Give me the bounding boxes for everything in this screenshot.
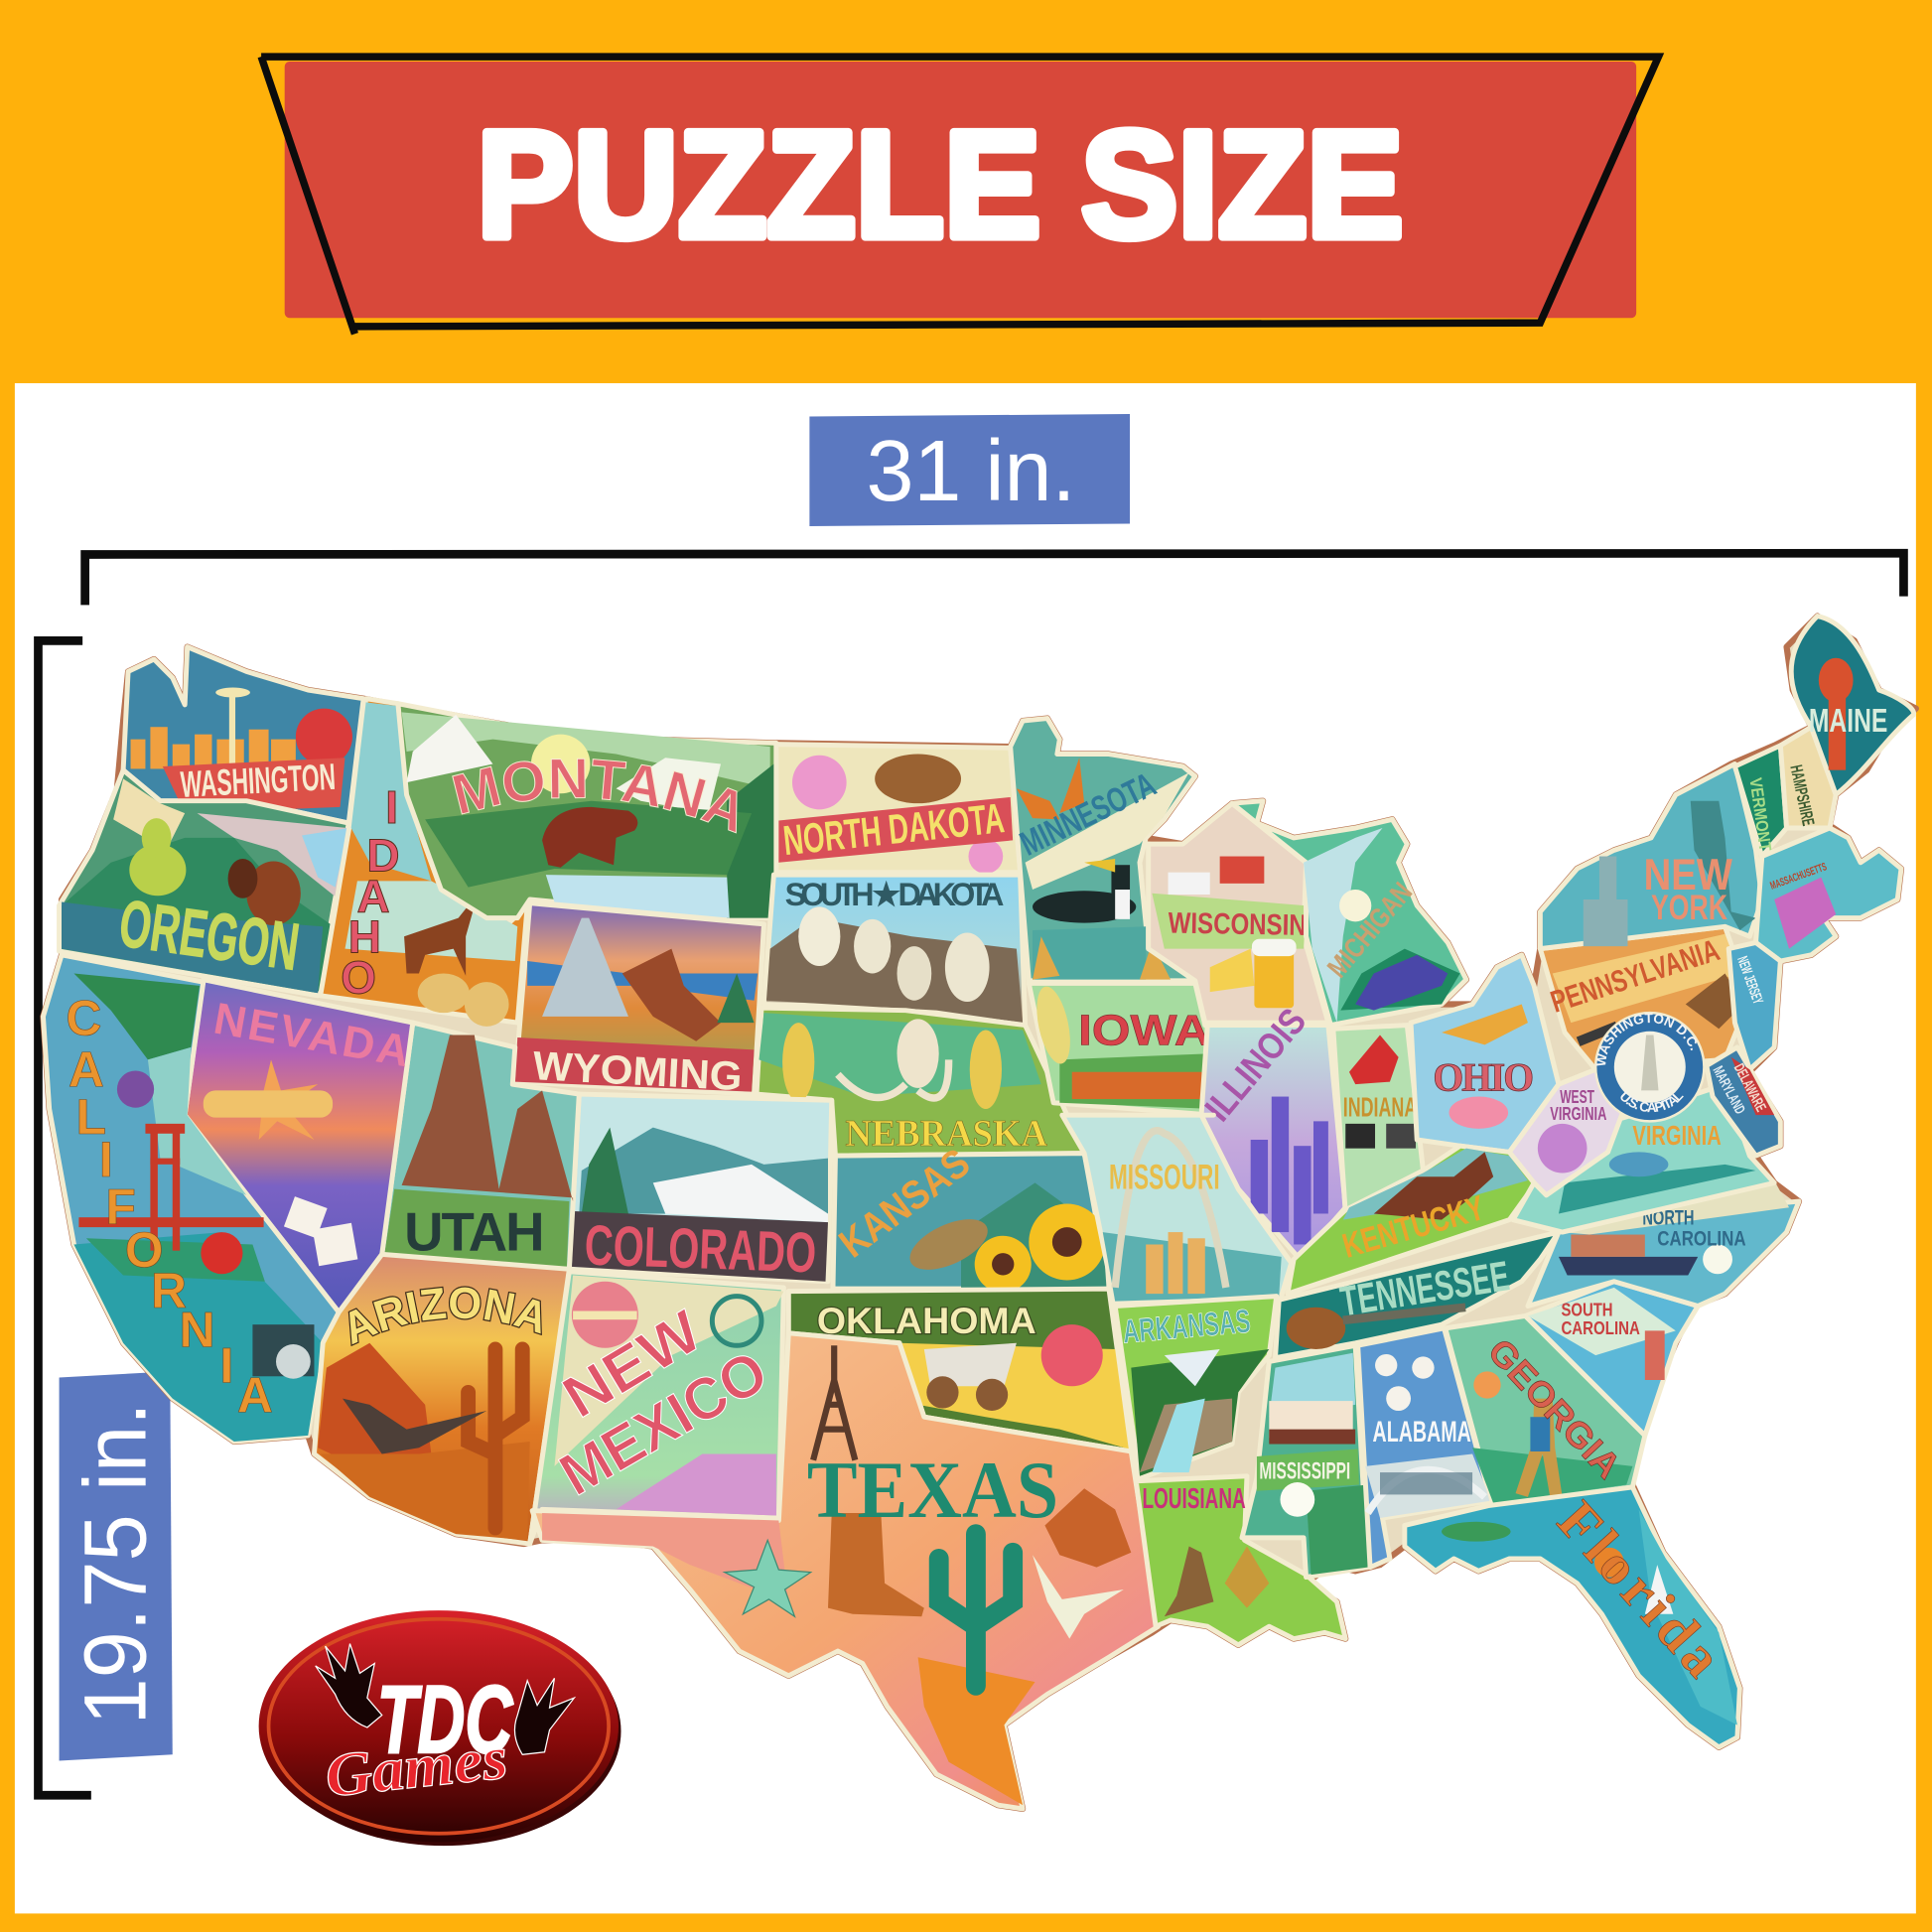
label: SOUTH ★ DAKOTA — [785, 877, 1004, 912]
icon: NYC skyline — [1584, 857, 1627, 946]
label: NORTH DAKOTA — [781, 794, 1007, 864]
states: Vermont and New Hampshire — [1734, 727, 1836, 857]
state: Arkansas — [1115, 1297, 1277, 1478]
label: MICHIGAN — [1321, 877, 1419, 984]
icon: loon — [1033, 859, 1136, 923]
icon: St. Louis skyline — [1146, 1232, 1205, 1294]
state: Utah — [382, 1023, 579, 1269]
state: California — [43, 955, 339, 1442]
state: Oklahoma — [788, 1289, 1131, 1451]
icon: guitar — [1287, 1308, 1345, 1349]
label: H — [348, 910, 381, 962]
icon: steam train — [1072, 1072, 1207, 1099]
state: Nevada — [185, 980, 413, 1312]
label: KENTUCKY — [1338, 1189, 1488, 1266]
icon: sunflowers — [1029, 1204, 1105, 1280]
label: A — [237, 1367, 273, 1423]
label: YORK — [1651, 890, 1727, 927]
state: Michigan — [1232, 801, 1466, 1026]
label: NEW JERSEY — [1733, 954, 1765, 1007]
icon: moose — [404, 894, 479, 976]
state: North Carolina — [1528, 1180, 1799, 1307]
label: INDIANA — [1343, 1091, 1417, 1122]
icon: hot air balloon — [572, 1282, 638, 1348]
icon: potatoes — [418, 973, 470, 1013]
label: ILLINOIS — [1196, 1000, 1313, 1129]
icon: geyser — [542, 918, 628, 1017]
label: C — [66, 990, 101, 1045]
state: Illinois — [1196, 1000, 1345, 1259]
icon: poppy — [201, 1232, 242, 1274]
icon: cardinal — [1349, 1035, 1399, 1084]
icon: flower — [1339, 890, 1371, 921]
label: ARIZONA — [347, 1286, 542, 1346]
state: Virginia — [1513, 1084, 1774, 1232]
icon: left hand — [316, 1644, 382, 1727]
label — [341, 781, 400, 1003]
state: Wisconsin — [1149, 803, 1328, 1023]
icon: roadrunner — [343, 1399, 486, 1453]
label: KANSAS — [831, 1140, 978, 1267]
label: Florida — [1546, 1490, 1733, 1689]
icon: grapes — [117, 1070, 154, 1108]
icon: bison — [875, 755, 961, 803]
label: HAMPSHIRE — [1786, 763, 1819, 827]
label — [66, 990, 273, 1423]
icon: dreamcatcher — [712, 1297, 761, 1345]
icon: Statue of Liberty — [1691, 801, 1756, 930]
state: West Virginia — [1509, 1069, 1624, 1195]
icon: fleur-de-lis — [1225, 1547, 1269, 1608]
state: Louisiana — [1136, 1476, 1345, 1645]
state: Washington — [123, 647, 363, 823]
map of the USA — [40, 613, 1919, 1812]
logo word Games: Games — [322, 1725, 510, 1810]
state: Maine — [1791, 617, 1914, 794]
icon: barn — [1220, 857, 1264, 884]
label: OREGON — [115, 886, 304, 985]
height label: 19.75 in.: 19.75 in. — [65, 1402, 164, 1725]
icon: racehorse — [1374, 1152, 1493, 1220]
icon: vintage car — [1355, 955, 1448, 1011]
icon: peach — [1473, 1371, 1501, 1399]
state: Montana — [395, 701, 778, 921]
icon: cargo ship — [1559, 1257, 1698, 1276]
label: WASHINGTON — [180, 756, 337, 805]
label: L — [76, 1089, 106, 1145]
label: MINNESOTA — [1015, 765, 1162, 864]
label: OHIO — [1433, 1055, 1534, 1099]
icon: pelican — [1165, 1547, 1213, 1616]
label: A — [69, 1042, 104, 1098]
icon: apple — [296, 709, 352, 765]
icon: meadowlark — [902, 1209, 995, 1280]
state: Idaho — [321, 699, 527, 1027]
icon: cow — [1169, 873, 1210, 895]
map outline — [43, 617, 1916, 1809]
icon: rhododendron — [1538, 1124, 1587, 1173]
width label: 31 in. — [809, 414, 1130, 526]
icon: cheese — [1210, 949, 1254, 992]
label: NORTH — [1642, 1207, 1694, 1230]
label: OKLAHOMA — [817, 1300, 1036, 1341]
label: MARYLAND — [1710, 1064, 1747, 1117]
state: Tennessee — [1276, 1232, 1559, 1358]
state: Georgia — [1446, 1315, 1645, 1506]
label: F — [105, 1178, 136, 1234]
state: Iowa — [1029, 983, 1238, 1115]
white panel — [15, 383, 1916, 1913]
label: WASHINGTON D.C. — [1596, 1013, 1697, 1066]
state: Kentucky — [1288, 1146, 1538, 1294]
width label: 31 in.: 31 in. — [866, 423, 1075, 519]
icon: dogwood — [1703, 1244, 1732, 1274]
state: Missouri — [1062, 1115, 1292, 1304]
logo: TDC Games — [259, 1610, 621, 1846]
label: TENNESSEE — [1337, 1252, 1512, 1324]
state: Alabama — [1358, 1328, 1491, 1568]
state: Massachusetts and neighbours — [1756, 828, 1901, 961]
label: CAROLINA — [1657, 1228, 1746, 1251]
icon: alligator — [1442, 1522, 1511, 1542]
icon: bridge — [1368, 1469, 1484, 1513]
label: UTAH — [404, 1202, 545, 1263]
icon: waterfall — [1140, 1399, 1232, 1472]
icon: right hand — [514, 1678, 574, 1754]
label: PENNSYLVANIA — [1547, 932, 1724, 1020]
icon: cannon — [1577, 1022, 1619, 1046]
state: Colorado — [569, 1094, 832, 1285]
icon: saguaro — [939, 1534, 1013, 1686]
icon: star — [725, 1540, 811, 1616]
label: MAINE — [1809, 703, 1887, 740]
icon: rock formation — [402, 1035, 573, 1201]
label: I — [385, 781, 398, 833]
label: O — [341, 951, 376, 1003]
label: NEW — [1644, 851, 1733, 899]
label: IOWA — [1078, 1007, 1210, 1054]
icon: hat — [1044, 1488, 1131, 1568]
icon: Las Vegas star sign — [231, 1059, 318, 1140]
label: VIRGINIA — [1550, 1103, 1606, 1124]
icon: beer mug — [1254, 946, 1294, 1008]
icon: pig — [1449, 1097, 1508, 1129]
state: South Dakota — [763, 875, 1026, 1026]
icon: beaver — [246, 862, 301, 925]
state: South Carolina — [1525, 1282, 1698, 1436]
states: Delaware and Maryland — [1707, 1047, 1780, 1156]
icon: bear — [542, 807, 637, 868]
label: VIRGINIA — [1632, 1120, 1722, 1151]
label: WEST — [1560, 1086, 1594, 1107]
label: O — [125, 1222, 164, 1278]
icon: saguaro cactus — [469, 1349, 522, 1528]
icon: corn — [782, 1023, 814, 1102]
label: N — [180, 1302, 214, 1357]
icon: dice — [284, 1196, 328, 1238]
label: ARKANSAS — [1121, 1304, 1252, 1351]
label: CAROLINA — [1561, 1317, 1640, 1338]
label: U.S. CAPITAL — [1620, 1091, 1684, 1112]
label: I — [99, 1132, 113, 1187]
icon: butterfly — [1017, 758, 1084, 819]
icon: rose — [1041, 1324, 1103, 1386]
width bracket — [85, 553, 1903, 605]
icon: corn — [1031, 984, 1076, 1067]
state: Wyoming — [515, 903, 763, 1099]
badge: Washington D.C. — [1594, 1011, 1706, 1123]
label: I — [219, 1337, 233, 1393]
icon: oil derrick — [813, 1345, 855, 1460]
state: Texas — [532, 1333, 1159, 1809]
icon: skyline — [131, 727, 296, 768]
title: PUZZLE SIZE — [477, 100, 1404, 269]
icon: bronco — [622, 949, 721, 1041]
icon: orange — [1594, 1548, 1624, 1578]
title banner — [261, 57, 1658, 334]
label: A — [356, 870, 390, 921]
icon: diamond — [1165, 1349, 1220, 1386]
label: MEXICO — [549, 1337, 778, 1508]
label: ALABAMA — [1373, 1416, 1471, 1449]
state: Oregon — [60, 770, 348, 996]
icon: flower — [792, 756, 847, 809]
label: WYOMING — [532, 1042, 744, 1099]
icon: film clapper — [252, 1324, 314, 1376]
icon: dolphin — [1609, 1152, 1668, 1176]
icon: Mount Rushmore — [766, 906, 1023, 1023]
label: R — [151, 1263, 187, 1318]
state: Mississippi — [1242, 1345, 1368, 1578]
state: Minnesota — [1011, 719, 1195, 981]
state: Kansas — [831, 1140, 1109, 1293]
label: TEXAS — [807, 1445, 1058, 1535]
icon: Golden Gate bridge — [78, 1124, 264, 1251]
icon: checkered flags — [1345, 1124, 1375, 1149]
icon: magnolia — [1280, 1482, 1314, 1517]
label: NEBRASKA — [845, 1113, 1047, 1155]
label: MISSOURI — [1109, 1160, 1220, 1197]
label: NEW — [551, 1297, 713, 1431]
label: VERMONT — [1745, 776, 1776, 853]
state: Pennsylvania — [1540, 926, 1749, 1069]
label: SOUTH — [1561, 1299, 1613, 1319]
icon: covered wagon — [924, 1343, 1017, 1386]
icon: space shuttle — [1645, 1565, 1673, 1614]
state: Indiana — [1333, 1026, 1423, 1213]
icon: lobster — [1819, 658, 1854, 702]
icon: Liberty Bell — [1686, 973, 1743, 1029]
logo word TDC: TDC — [377, 1665, 514, 1773]
icon: pear — [129, 818, 186, 896]
icon: Gateway Arch — [1115, 1131, 1226, 1288]
icon: biplane — [1442, 1004, 1528, 1044]
state: Ohio — [1411, 955, 1559, 1152]
state: Nebraska — [757, 1008, 1084, 1156]
state: Florida — [1405, 1487, 1739, 1747]
label: MASSACHUSETTS — [1769, 861, 1829, 893]
label: D — [366, 829, 400, 881]
icon: golfer — [1516, 1399, 1563, 1497]
label: LOUISIANA — [1142, 1483, 1246, 1515]
state: New Mexico — [530, 1272, 783, 1544]
label: DELAWARE — [1730, 1061, 1768, 1115]
label: NEVADA — [210, 995, 413, 1076]
state: North Dakota — [776, 745, 1021, 874]
label: MISSISSIPPI — [1259, 1457, 1350, 1483]
lake — [546, 875, 730, 918]
state: Arizona — [312, 1252, 567, 1547]
icon: Chicago skyline — [1251, 1097, 1328, 1244]
label: WISCONSIN — [1168, 906, 1307, 942]
icon: riverboat — [1269, 1401, 1353, 1438]
icon: mammoth skull — [897, 1019, 939, 1088]
icon: cotton branch — [1375, 1354, 1397, 1376]
icon: lighthouse — [1645, 1330, 1665, 1380]
state: New Jersey — [1728, 942, 1780, 1069]
label: GEORGIA — [1480, 1330, 1629, 1486]
height bracket — [38, 640, 91, 1795]
icon: cowboy boot — [828, 1513, 924, 1616]
label: MONTANA — [452, 759, 738, 834]
icon: longhorn — [1033, 1555, 1124, 1639]
state: New York — [1540, 763, 1762, 949]
label: COLORADO — [584, 1213, 817, 1285]
